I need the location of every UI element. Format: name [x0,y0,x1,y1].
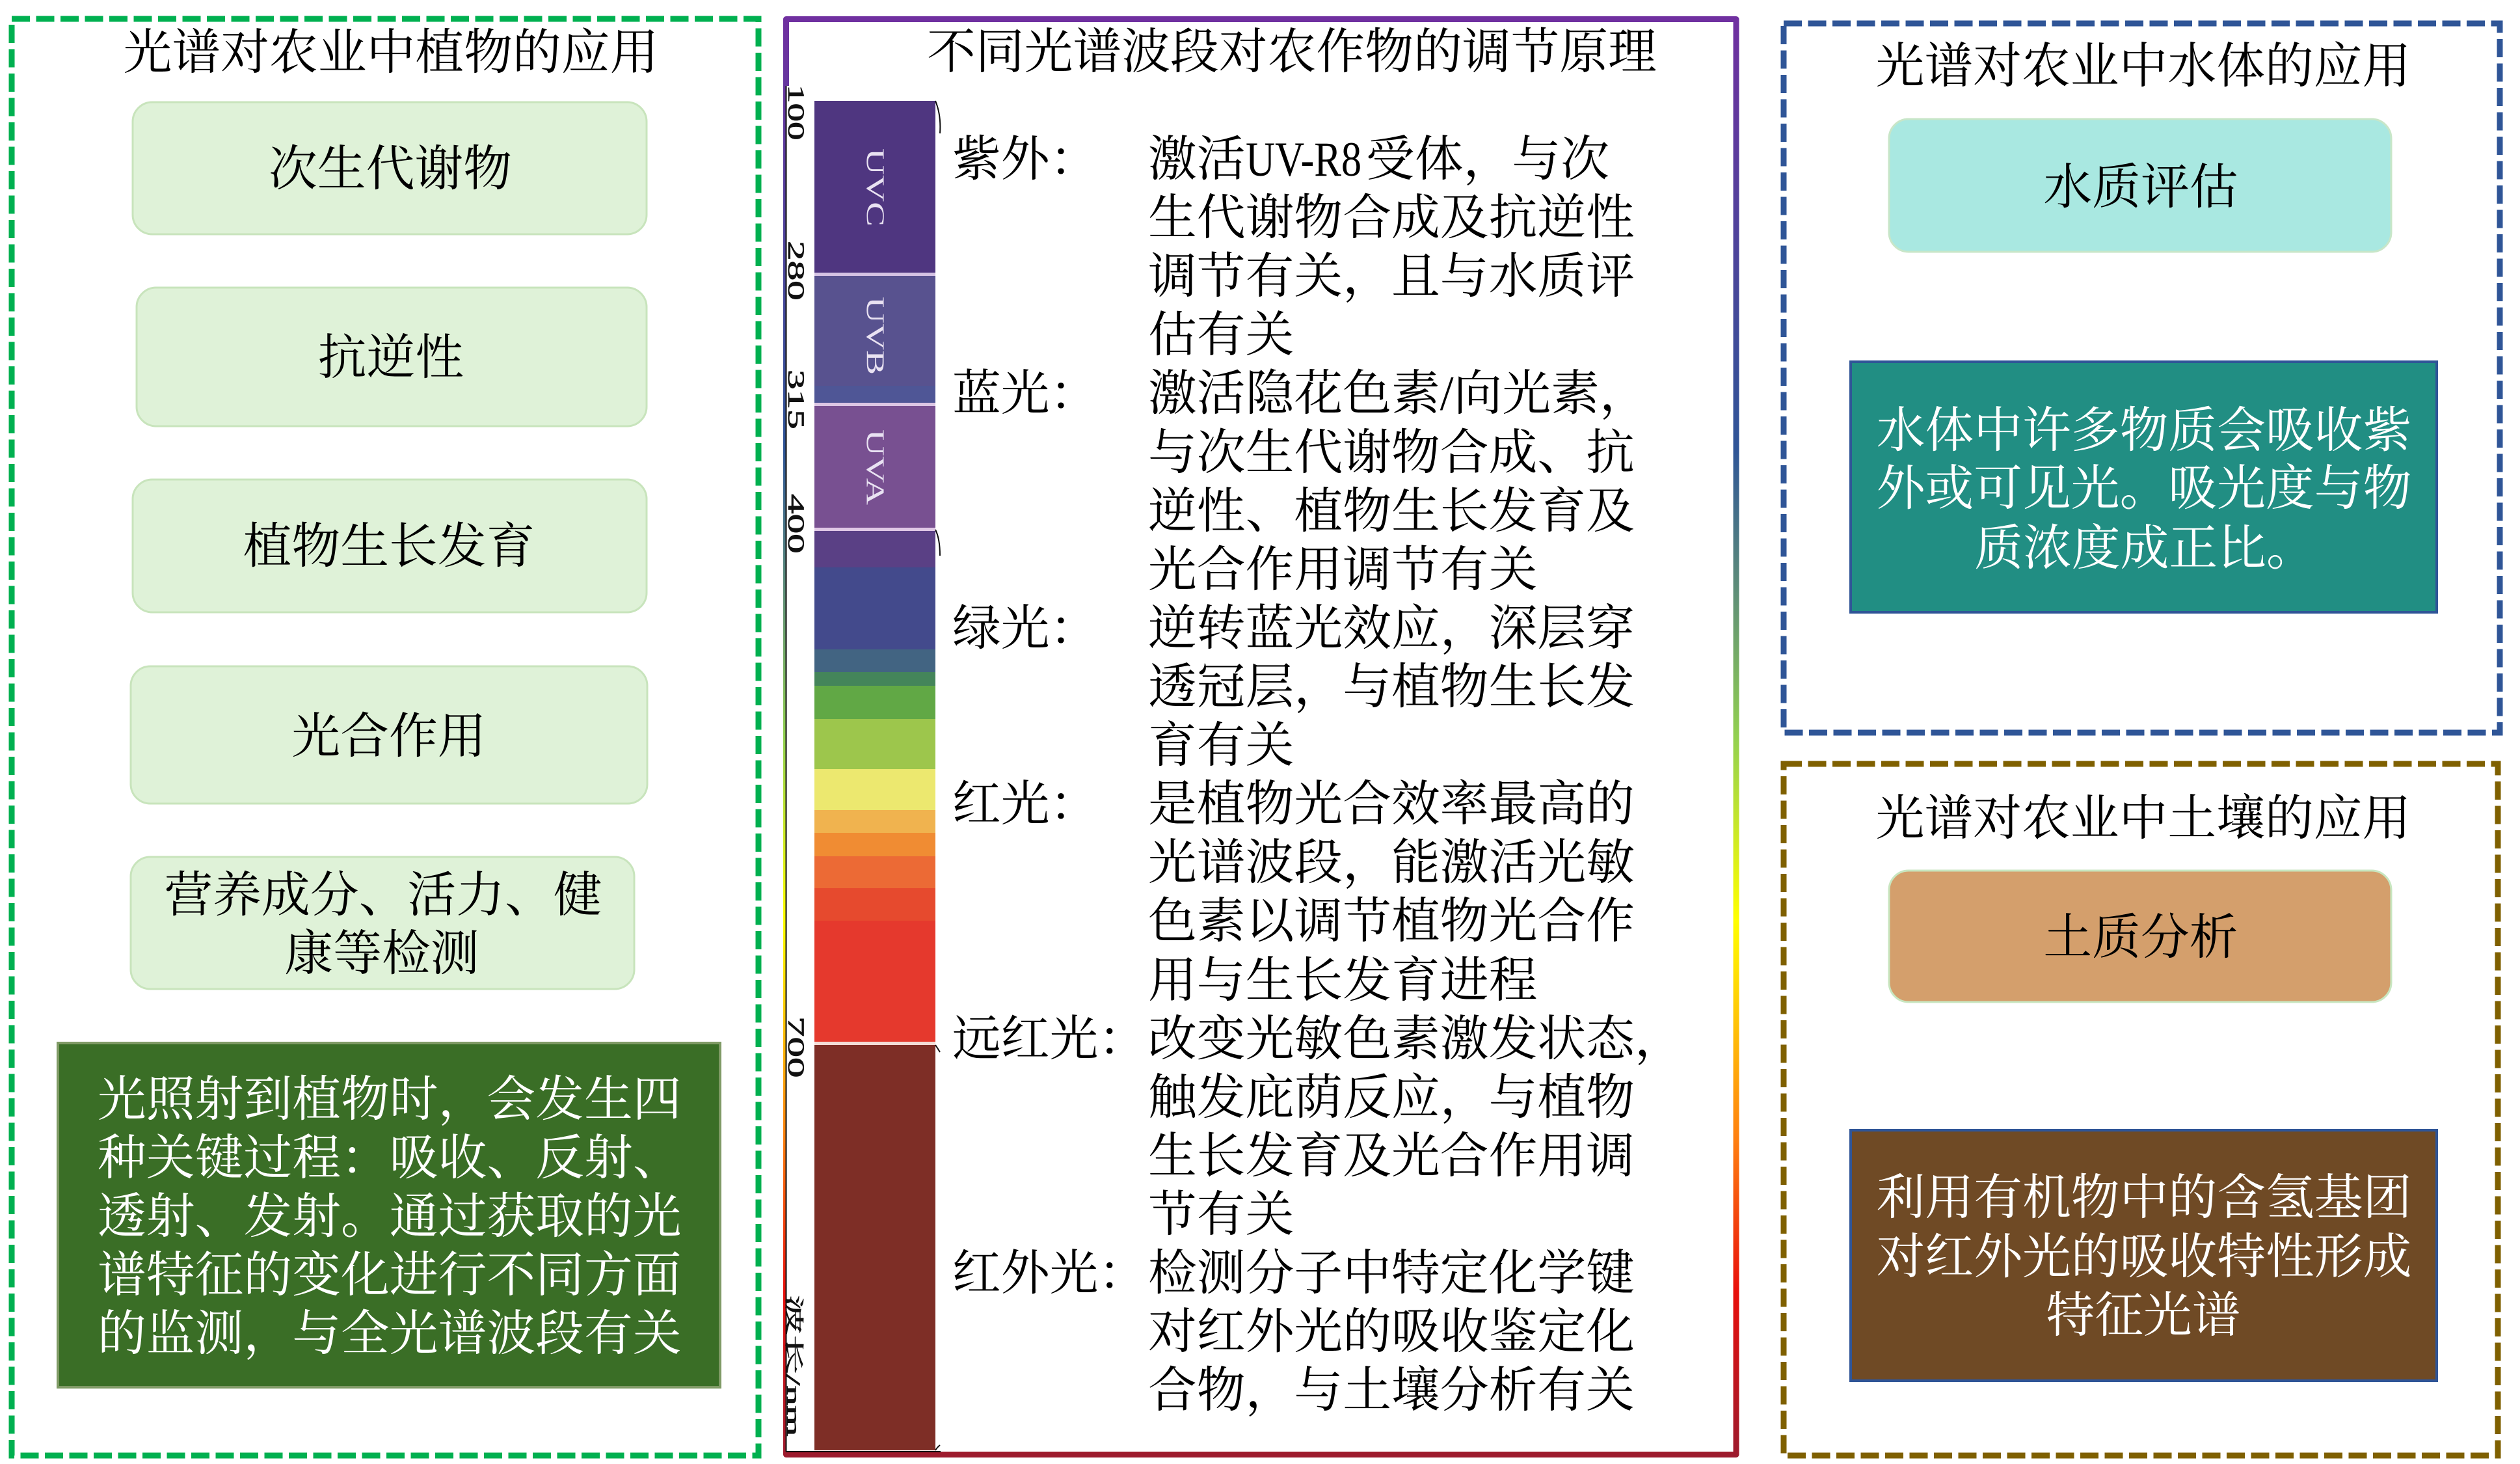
spectrum chart: 700 [783,1016,809,1078]
UV description: 受体，与次 [1366,133,1609,187]
band label column: 蓝光： [952,367,1098,421]
soil panel dashed frame [1784,764,2498,1456]
callout: plant light processes: 种关键过程：吸收、反射、 [98,1132,682,1186]
blue light description: 光合作用调节有关 [1148,543,1537,597]
box: photosynthesis [131,666,647,804]
heading: water applications: 光谱对农业中水体的应用 [1876,40,2411,94]
callout: water absorption: 水体中许多物质会吸收紫 [1877,404,2411,458]
callout: plant light processes: 谱特征的变化进行不同方面 [98,1249,682,1303]
UV description: 估有关 [1148,308,1294,362]
far-red description: 生长发育及光合作用调 [1148,1130,1635,1184]
box: stress resistance: 抗逆性 [318,331,464,385]
spectrum chart: 100 [783,85,809,140]
red light description: 光谱波段，能激活光敏 [1148,836,1635,890]
callout: soil infrared absorption [1851,1130,2437,1381]
spectrum chart: UVA [861,429,889,505]
callout: soil infrared absorption: 特征光谱 [2046,1289,2241,1343]
box: secondary metabolites: 次生代谢物 [269,142,512,197]
green light description: 育有关 [1148,719,1294,773]
band label column: 紫外： [952,133,1098,187]
red light description: 色素以调节植物光合作 [1148,895,1635,949]
callout: plant light processes: 透射、发射。通过获取的光 [98,1190,682,1244]
far-red description: 触发庇荫反应，与植物 [1148,1071,1635,1125]
green light description: 逆转蓝光效应，深层穿 [1148,602,1635,656]
infrared description: 对红外光的吸收鉴定化 [1148,1305,1635,1359]
center panel gradient frame [786,20,1736,1455]
blue light description: 激活隐花色素/向光素， [1148,367,1648,421]
infrared description [1148,1247,1635,1418]
spectrum chart: 280 [783,241,809,301]
UV description: UV-R8 [1246,133,1361,186]
spectrum chart: UVC [861,148,889,226]
spectrum chart: 波长/nm [783,1295,804,1437]
box: stress resistance [137,288,647,426]
band label column: 绿光： [952,602,1098,656]
heading: regulation principles: 不同光谱波段对农作物的调节原理 [927,25,1657,79]
box: soil analysis [1889,871,2391,1002]
box: water quality assessment: 水质评估 [2043,161,2238,215]
callout: water absorption: 质浓度成正比。 [1974,522,2315,576]
UV description [1148,133,1635,362]
box: soil analysis: 土质分析 [2043,911,2238,965]
band label column [952,133,1147,1301]
spectrum chart [783,85,942,1452]
band label column: 红外光： [952,1247,1147,1301]
infrared description: 合物，与土壤分析有关 [1148,1364,1635,1418]
UV description: 激活 [1148,133,1246,187]
far-red description: 节有关 [1148,1188,1294,1242]
box: nutrition detection [131,857,634,989]
box: plant growth: 植物生长发育 [243,520,535,574]
green light description [1148,602,1635,773]
band label column: 远红光： [952,1012,1147,1066]
infrared description: 检测分子中特定化学键 [1148,1247,1635,1301]
UV description: 调节有关，且与水质评 [1148,250,1635,304]
plant panel dashed frame [12,19,758,1456]
blue light description [1148,367,1648,597]
far-red description: 改变光敏色素激发状态， [1148,1012,1683,1066]
spectrum chart: 315 [783,370,809,429]
callout: water absorption: 外或可见光。吸光度与物 [1877,462,2411,516]
band label column: 红光： [952,778,1098,832]
panel: spectral regulation principles [783,20,1736,1455]
box: plant growth [133,480,647,612]
spectrum chart: UVB [861,297,889,375]
box: nutrition detection: 康等检测 [284,927,479,981]
blue light description: 逆性、植物生长发育及 [1148,485,1635,539]
red light description: 用与生长发育进程 [1148,954,1537,1008]
callout: water absorption [1851,362,2437,612]
green light description: 透冠层，与植物生长发 [1148,660,1635,714]
box: water quality assessment [1889,119,2391,252]
callout: plant light processes: 的监测，与全光谱波段有关 [98,1307,682,1361]
blue light description: 与次生代谢物合成、抗 [1148,426,1635,480]
panel: soil applications [1784,764,2498,1456]
panel: plant applications [12,19,758,1456]
red light description: 是植物光合效率最高的 [1148,778,1635,832]
box: secondary metabolites [133,102,647,234]
water panel dashed frame [1784,23,2500,733]
heading: soil applications: 光谱对农业中土壤的应用 [1876,792,2411,846]
red light description [1148,778,1635,1008]
spectrum chart: 400 [783,494,809,554]
callout: soil infrared absorption: 对红外光的吸收特性形成 [1877,1230,2411,1284]
panel: water applications [1784,23,2500,733]
heading: plant applications: 光谱对农业中植物的应用 [124,26,658,80]
callout: plant light processes [58,1043,720,1387]
box: photosynthesis: 光合作用 [291,710,487,764]
box: nutrition detection: 营养成分、活力、健 [164,869,602,923]
callout: plant light processes: 光照射到植物时，会发生四 [98,1073,682,1127]
far-red description [1148,1012,1683,1242]
UV description: 生代谢物合成及抗逆性 [1148,191,1635,245]
callout: soil infrared absorption: 利用有机物中的含氢基团 [1877,1171,2411,1225]
